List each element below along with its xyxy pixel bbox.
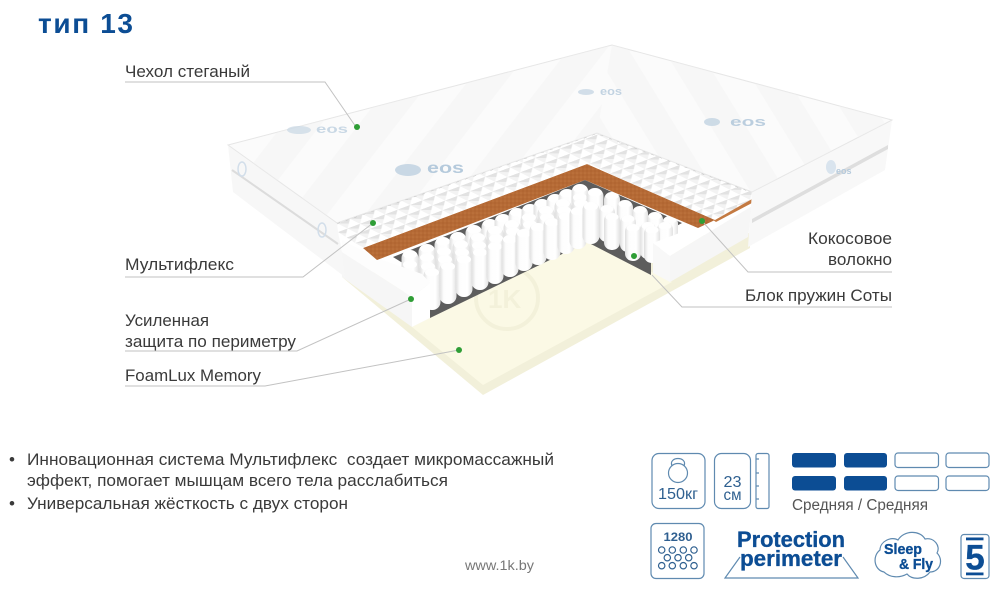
feature list: Инновационная система Мультифлекс создает микромассажный — [27, 450, 554, 469]
callout: Усиленная защита по периметру: защита по периметру — [125, 332, 296, 351]
callout: Блок пружин Соты: Блок пружин Соты — [745, 286, 892, 305]
icon: height 23 cm: 23 — [724, 474, 742, 491]
badge: 5 years — [961, 534, 989, 578]
callout: Усиленная защита по периметру — [125, 296, 414, 351]
callout: Кокосовое волокно: волокно — [828, 250, 892, 269]
callout: FoamLux Memory: FoamLux Memory — [125, 366, 261, 385]
layer: spring base — [393, 180, 682, 318]
callout: Усиленная защита по периметру: Усиленная — [125, 311, 209, 330]
callout: Чехол стеганый — [125, 62, 360, 130]
logo: eos rear centre: eos — [600, 86, 622, 98]
callout: Чехол стеганый: Чехол стеганый — [125, 62, 250, 81]
firmness scale — [792, 453, 989, 514]
layer: pocket spring block — [402, 184, 678, 310]
icon: 1280 springs — [651, 524, 704, 578]
badge: Protection perimeter — [725, 527, 858, 578]
callout: Кокосовое волокно — [699, 218, 892, 272]
feature list: Универсальная жёсткость с двух сторон — [27, 494, 348, 513]
source url: www.1k.by — [464, 557, 534, 573]
icon: max weight 150 kg: 150кг — [658, 486, 698, 503]
layer: left perimeter block — [342, 240, 430, 327]
watermark: 1k.by — [476, 267, 538, 329]
badge: Protection perimeter: perimeter — [740, 546, 842, 571]
layer: right side cover: eos — [836, 166, 852, 176]
logo: eos right: eos — [730, 114, 766, 129]
mattress cutaway illustration — [228, 45, 892, 395]
firmness label: Средняя / Средняя — [792, 497, 928, 514]
layer: multiflex foam — [337, 133, 752, 248]
layer: coconut fibre — [337, 164, 752, 260]
feature list: • — [9, 494, 15, 513]
badge: Sleep & Fly: & Fly — [899, 557, 933, 573]
logo: eos rear centre — [578, 86, 622, 98]
logo: eos front: eos — [427, 160, 464, 177]
icon: max weight 150 kg — [652, 454, 705, 508]
logo: eos rear left: eos — [316, 122, 348, 136]
logo: eos front — [395, 160, 464, 177]
logo: eos rear left — [287, 122, 348, 136]
callout: FoamLux Memory — [125, 347, 462, 386]
layer: right side cover — [748, 120, 892, 247]
callout: Блок пружин Соты — [631, 253, 892, 307]
callout: Кокосовое волокно: Кокосовое — [808, 229, 892, 248]
layer: quilted top cover — [228, 45, 892, 223]
layer: left side cover — [228, 145, 345, 277]
ruler — [756, 454, 769, 508]
title: тип 13 — [38, 8, 133, 39]
badge: Sleep & Fly — [875, 532, 941, 578]
icon: 1280 springs: 1280 — [664, 530, 693, 544]
feature list: эффект, помогает мышцам всего тела расслабиться — [27, 471, 448, 490]
logo: eos right — [704, 114, 766, 129]
watermark: 1k.by: 1K — [488, 284, 521, 314]
feature list — [9, 450, 554, 513]
layer: right perimeter block — [653, 202, 752, 282]
badge: Sleep & Fly: Sleep — [884, 542, 922, 558]
callout: Мультифлекс — [125, 220, 376, 277]
layer: foam base slab — [342, 233, 750, 395]
icon: height 23 cm — [714, 454, 769, 508]
callout: Мультифлекс: Мультифлекс — [125, 255, 235, 274]
badge: Protection perimeter: Protection — [737, 527, 845, 552]
badge: 5 years: 5 — [965, 538, 985, 578]
icon: height 23 cm: см — [724, 487, 742, 504]
feature list: • — [9, 450, 15, 469]
